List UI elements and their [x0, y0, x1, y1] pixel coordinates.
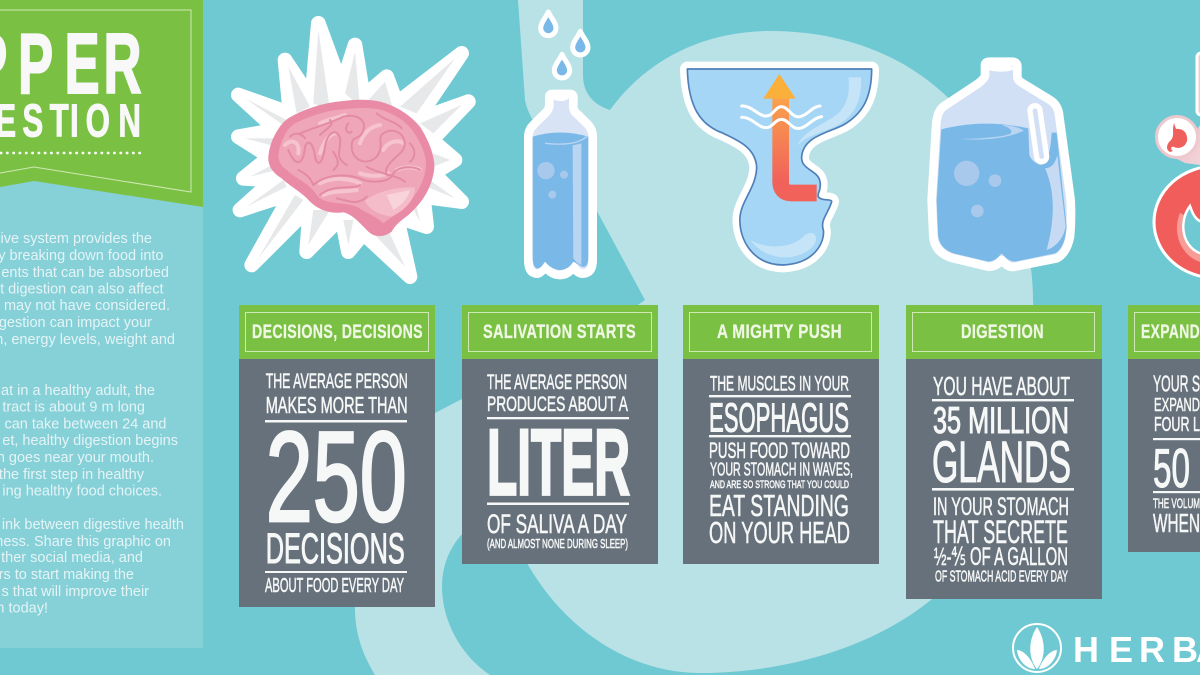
intro paragraph 2: tract is about 9 m long: [2, 400, 145, 416]
intro paragraph 2: the first step in healthy: [0, 467, 145, 483]
logo: herbalife: [1013, 624, 1200, 672]
panel: digestion: [906, 305, 1102, 599]
body text: [265, 370, 408, 597]
body text: YOU HAVE ABOUT: [933, 371, 1070, 401]
intro paragraph 1: [0, 231, 175, 348]
intro paragraph 1: t digestion can also affect: [0, 282, 164, 298]
icon: drop 3: [554, 54, 570, 78]
intro paragraph 1: ents that can be absorbed: [1, 265, 169, 281]
body text: MAKES MORE THAN: [266, 392, 408, 418]
intro paragraph 3: [0, 517, 184, 616]
icon: expanding stomach (cropped): [1154, 53, 1200, 278]
body text: THE AVERAGE PERSON: [487, 371, 627, 394]
intro paragraph 2: [0, 383, 178, 500]
body text: [709, 372, 853, 550]
icon: water drops and bottle: [528, 12, 593, 275]
intro paragraph 1: n, energy levels, weight and: [0, 332, 175, 348]
body text: IN YOUR STOMACH: [933, 493, 1069, 521]
intro paragraph 1: y breaking down food into: [0, 248, 164, 264]
intro paragraph 2: n goes near your mouth.: [0, 450, 154, 466]
intro paragraph 1: may not have considered.: [4, 298, 170, 314]
body text: ABOUT FOOD EVERY DAY: [265, 575, 404, 597]
intro paragraph 2: ing healthy food choices.: [2, 484, 162, 500]
intro paragraph 1: gestion can impact your: [0, 315, 152, 331]
intro paragraph 1: ive system provides the: [0, 231, 152, 247]
body text: LITER: [487, 410, 630, 514]
body text: AND ARE SO STRONG THAT YOU COULD: [710, 479, 849, 491]
icon: gallon jug: [932, 62, 1071, 267]
body text: EAT STANDING: [709, 488, 849, 523]
intro paragraph 2: et, healthy digestion begins: [2, 433, 178, 449]
intro paragraph 2: at in a healthy adult, the: [1, 383, 155, 399]
icon: stomach with upward arrow: [687, 69, 872, 265]
body text: PRODUCES ABOUT A: [487, 392, 628, 416]
body text: [487, 371, 630, 551]
intro paragraph 3: ther social media, and: [1, 550, 143, 566]
intro paragraph 2: can take between 24 and: [4, 416, 166, 432]
panel: salivation: [462, 305, 658, 564]
intro paragraph 3: s that will improve their: [2, 584, 149, 600]
heading: A MIGHTY PUSH: [717, 322, 842, 343]
title banner: [0, 0, 203, 207]
arrow: [763, 74, 817, 193]
icon: drop 1: [541, 12, 556, 36]
intro paragraph 3: ink between digestive health: [2, 517, 184, 533]
body text: ESOPHAGUS: [709, 394, 849, 440]
body text: OF STOMACH ACID EVERY DAY: [935, 568, 1068, 586]
body text: GLANDS: [932, 430, 1071, 495]
digestive tract background shape: [355, 0, 1034, 675]
body text: [1153, 370, 1200, 538]
body text: ½-⅘ OF A GALLON: [934, 543, 1068, 571]
body text: 250: [266, 406, 407, 549]
body text: ON YOUR HEAD: [709, 515, 850, 550]
body text: YOUR STOMACH IN WAVES,: [710, 460, 853, 480]
intro paragraph 3: ness. Share this graphic on: [0, 534, 171, 550]
body text: THE MUSCLES IN YOUR: [710, 372, 849, 396]
panel: intro text: [0, 0, 203, 648]
intro paragraph 3: rs to start making the: [0, 567, 134, 583]
body text: DECISIONS: [266, 525, 405, 573]
panel: expanding (cropped): [1128, 305, 1200, 552]
icon: brain in starburst: [238, 23, 468, 277]
body text: THAT SECRETE: [933, 514, 1068, 550]
heading: DECISIONS, DECISIONS: [252, 322, 423, 343]
heading: SALIVATION STARTS: [483, 322, 636, 343]
icon: drop 2: [573, 31, 588, 55]
panel: a mighty push: [683, 305, 879, 564]
heading: DIGESTION: [961, 322, 1044, 343]
body text: 35 MILLION: [933, 400, 1069, 441]
body text: (AND ALMOST NONE DURING SLEEP): [487, 536, 628, 551]
body text: THE AVERAGE PERSON: [266, 370, 408, 393]
body text: PUSH FOOD TOWARD: [709, 438, 850, 463]
icon: bottle: [528, 94, 593, 275]
body text: [932, 371, 1074, 586]
body text: OF SALIVA A DAY: [487, 509, 627, 539]
panel: decisions: [239, 305, 435, 607]
